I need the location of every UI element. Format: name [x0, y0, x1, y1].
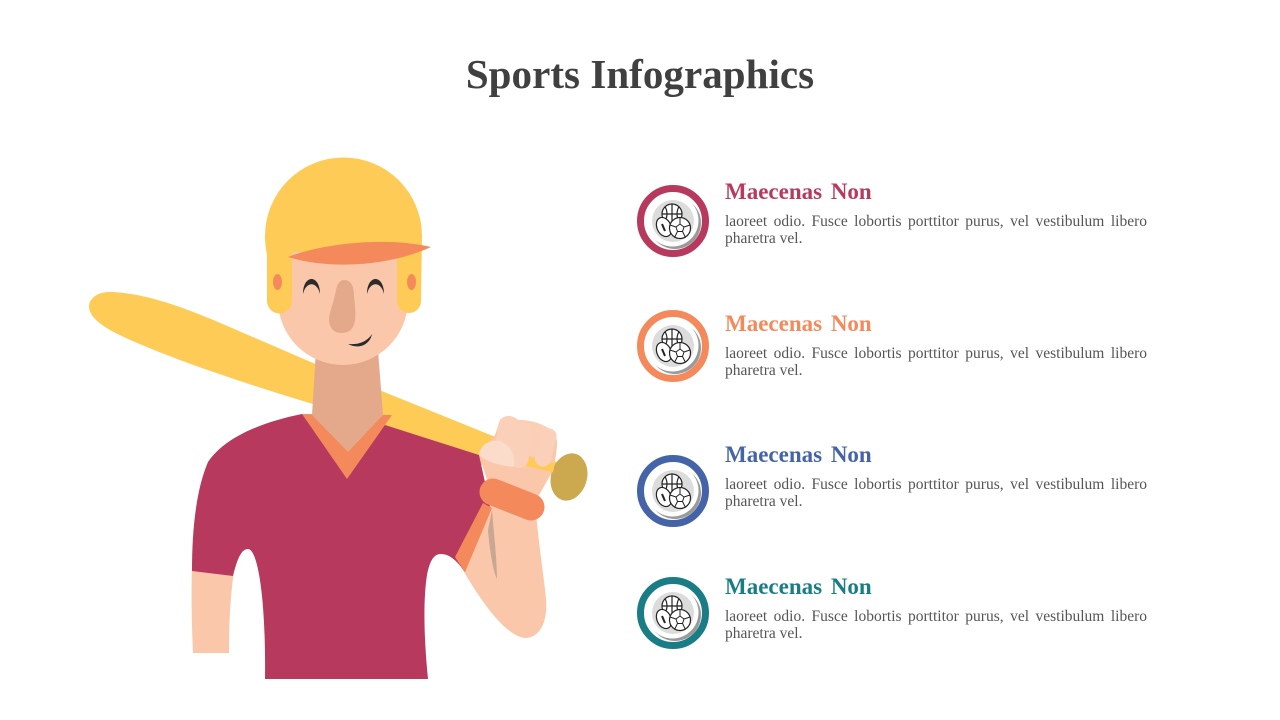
- text block: item 1: laoreet odio. Fusce lobortis porttitor purus, vel vestibulum libero pharetra vel.: [725, 213, 1147, 247]
- text block: item 3: [725, 442, 1147, 510]
- nose: [329, 280, 355, 333]
- icon: sports balls blue: [640, 458, 706, 524]
- text block: item 2: Maecenas Non: [725, 311, 872, 336]
- ears: [273, 274, 282, 290]
- sleeve cuff: [455, 503, 492, 572]
- visor: [288, 242, 431, 265]
- text block: item 4: laoreet odio. Fusce lobortis porttitor purus, vel vestibulum libero pharetra vel.: [725, 608, 1147, 642]
- text block: item 3: laoreet odio. Fusce lobortis porttitor purus, vel vestibulum libero pharetra vel.: [725, 476, 1147, 510]
- wristband: [493, 492, 531, 507]
- fingers: [492, 415, 558, 469]
- fist back: [497, 416, 552, 460]
- icon: sports balls teal: [640, 580, 706, 646]
- title: Sports Infographics: [466, 51, 814, 97]
- baseball bat: [89, 292, 557, 473]
- text block: item 3: Maecenas Non: [725, 442, 872, 467]
- bat grip between fingers: [513, 458, 554, 468]
- helmet: [265, 158, 422, 314]
- text block: item 1: Maecenas Non: [725, 179, 872, 204]
- shirt: [192, 414, 490, 679]
- bat knob: [545, 449, 593, 505]
- raised forearm: [460, 490, 546, 638]
- text block: item 4: [725, 574, 1147, 642]
- illustration: baseball player: [89, 158, 593, 679]
- eyes: [303, 279, 320, 294]
- text block: item 2: [725, 311, 1147, 379]
- text block: item 2: laoreet odio. Fusce lobortis porttitor purus, vel vestibulum libero pharetra vel.: [725, 345, 1147, 379]
- neck: [312, 350, 383, 452]
- thumb: [479, 441, 514, 467]
- icon: sports balls orange: [640, 314, 706, 378]
- arm vein: [488, 510, 497, 579]
- text block: item 4: Maecenas Non: [725, 574, 872, 599]
- collar: [302, 414, 392, 479]
- lower left arm: [192, 565, 234, 653]
- icon: sports balls red: [640, 188, 706, 254]
- text block: item 1: [725, 179, 1147, 247]
- smile: [348, 334, 372, 346]
- hand: [479, 416, 557, 497]
- face: [278, 245, 408, 365]
